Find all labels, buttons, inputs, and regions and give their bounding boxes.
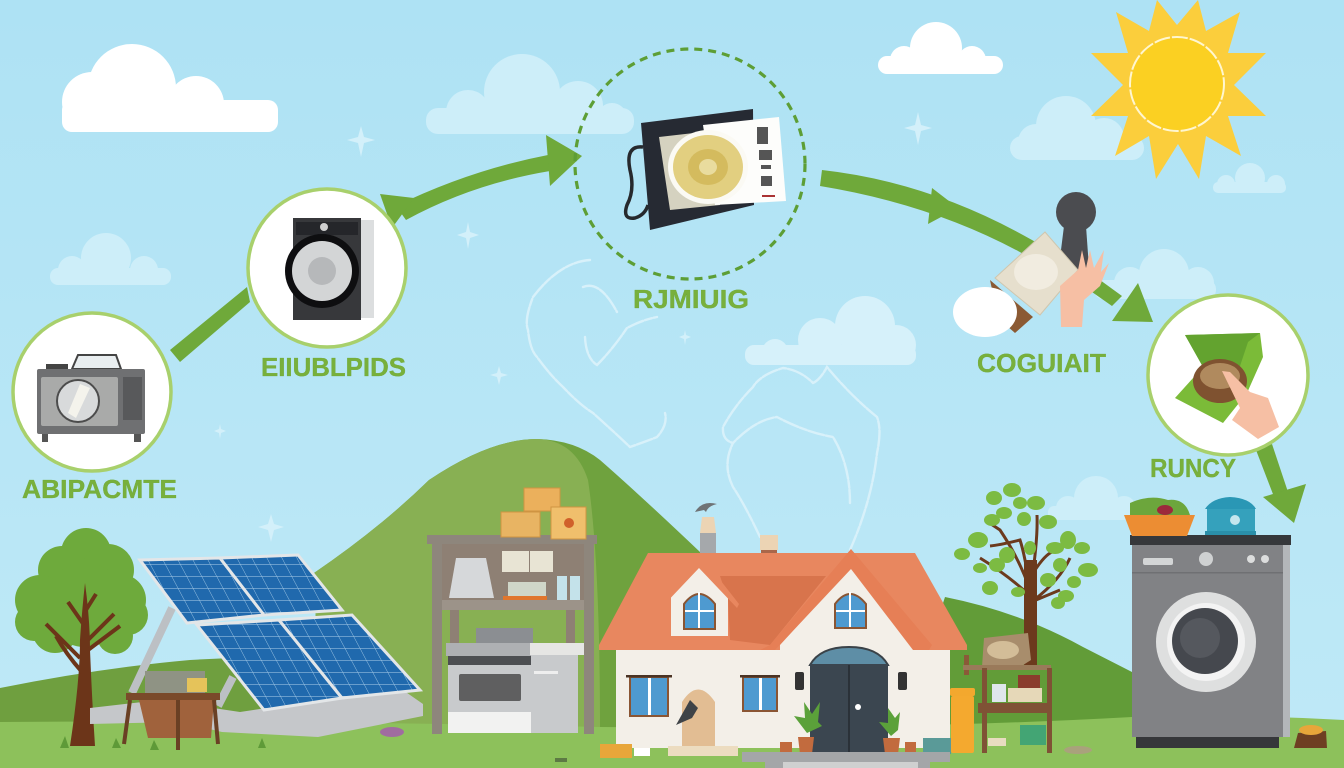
white mound	[953, 287, 1017, 337]
label: step 2: EIIUBLPIDS	[261, 352, 406, 382]
clouds	[50, 22, 1286, 520]
shelf unit with appliances	[427, 488, 597, 734]
dark head	[1056, 192, 1096, 278]
steps	[742, 752, 950, 768]
dormer	[671, 565, 728, 636]
gable roof edge	[760, 549, 932, 650]
main door	[810, 647, 888, 752]
hand	[1060, 250, 1109, 327]
small shelf and bin	[950, 633, 1052, 753]
step 3: dashed circle with device	[575, 49, 805, 279]
arrow: step 1 to 2	[170, 287, 250, 362]
hills	[0, 439, 1132, 735]
step 1: circle with microwave	[13, 313, 171, 471]
wall lamps	[795, 672, 804, 690]
tree left	[15, 528, 148, 746]
label: step 4: COGUIAIT	[977, 348, 1106, 378]
chimneys	[695, 503, 778, 562]
small door	[682, 690, 715, 746]
boxes	[501, 512, 540, 537]
walls	[616, 640, 950, 748]
ground	[0, 716, 1344, 768]
arrows: process flow	[170, 135, 1153, 362]
beige bag	[995, 232, 1078, 315]
solar panels	[90, 555, 423, 750]
small tree right	[954, 483, 1098, 667]
stove	[476, 628, 533, 645]
main roof	[599, 553, 967, 650]
large washing machine	[1124, 497, 1291, 748]
pot	[1207, 509, 1255, 533]
arrow: step 3 to 4	[820, 170, 1153, 322]
plants	[780, 702, 951, 756]
arrow: step 2 to 3	[380, 135, 582, 228]
basket with vegetables	[1130, 498, 1190, 515]
icon: black device with plate and card	[626, 109, 786, 230]
brown sleeve	[990, 280, 1033, 333]
icon: microwave	[37, 355, 145, 442]
icon: front loader	[285, 218, 374, 320]
ground pile	[600, 744, 632, 758]
gable wall	[780, 567, 920, 748]
arrow: step 5 down	[1256, 444, 1306, 523]
table and crate	[139, 700, 214, 738]
label: step 1: ABIPACMTE	[22, 474, 177, 504]
bin	[950, 688, 975, 696]
ground details	[60, 725, 1327, 762]
label: step 3: RJMIUIG	[633, 284, 749, 314]
faint water-line world map	[527, 260, 880, 550]
step 2: circle with washing machine	[248, 189, 406, 347]
windows	[684, 592, 866, 629]
icon: green wrap, food and hand	[1175, 333, 1279, 439]
step 5: circle with green wrap	[1148, 295, 1308, 455]
step 4: grinder bag and hand	[953, 192, 1109, 337]
sparkles	[214, 112, 932, 542]
sun	[1091, 0, 1266, 179]
label: step 5: RUNCY	[1150, 453, 1236, 483]
house	[599, 503, 967, 768]
